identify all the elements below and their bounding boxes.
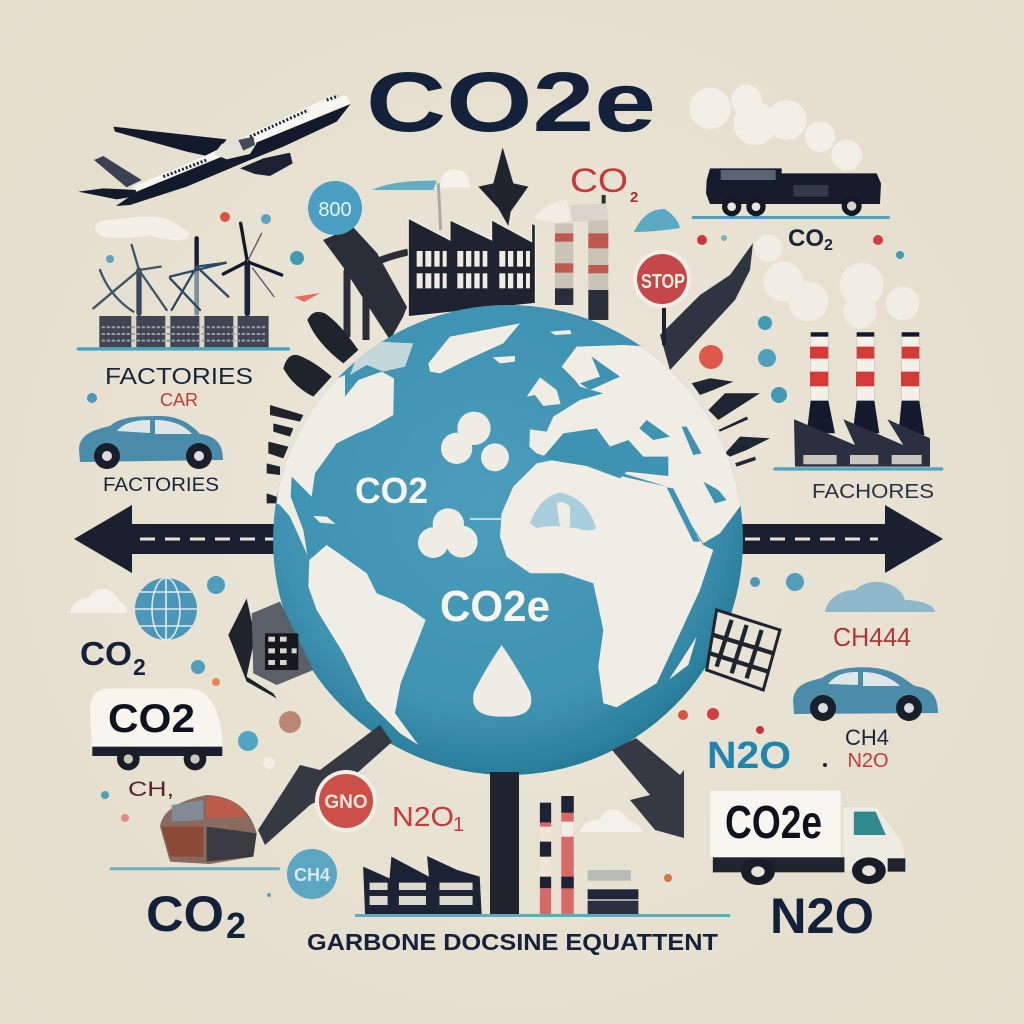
land: south america	[308, 545, 426, 745]
icon: stop sign: STOP	[641, 271, 685, 293]
icon: cloud right	[825, 582, 935, 612]
sea: baltic	[580, 357, 620, 390]
icon: airplane	[78, 96, 351, 206]
label: N2O red: N2O	[392, 801, 454, 832]
icon: blue blob	[634, 209, 680, 232]
land: north america	[277, 372, 394, 555]
icon: cloud left	[70, 588, 127, 613]
label: CH3 left: CH,	[128, 778, 174, 801]
icon: bottom factory	[363, 856, 482, 914]
sea: caspian	[682, 427, 702, 455]
badge: 800: 800	[318, 199, 352, 221]
arrow: top down	[478, 147, 528, 226]
debris left of globe	[267, 312, 358, 503]
title: CO2e	[366, 55, 656, 149]
icon: blue car right	[793, 667, 938, 721]
label: CO2e on globe: CO2e	[440, 582, 550, 631]
label: CO2 bottom left: CO	[146, 886, 224, 942]
icon: dark diagonal arrow lower left	[258, 725, 392, 845]
label: FACTORIES upper left: FACTORIES	[105, 363, 253, 389]
icon: grid map right	[707, 610, 780, 690]
label: CH4 N2O stack: CH4	[845, 725, 889, 750]
arrow: right road	[720, 505, 943, 573]
label: CO2 on white truck: CO2	[108, 697, 195, 741]
land: greenland	[428, 323, 520, 373]
arrow: upper right dark	[660, 243, 753, 370]
icon: central factory	[408, 218, 535, 317]
arrow: lower right	[612, 738, 684, 838]
land: africa	[500, 457, 713, 707]
land: cuba	[313, 516, 336, 524]
land: arctic islands	[350, 342, 413, 375]
land: iceland	[493, 356, 515, 363]
label: N2O bottom right: N2O	[770, 888, 874, 944]
badge: GNO: GNO	[324, 792, 368, 813]
icon: small cloud bottom	[580, 810, 642, 832]
label: N2O red subscript: 1	[453, 814, 464, 836]
icon: rusty machine	[110, 795, 280, 870]
molecule top	[441, 412, 509, 471]
label: subscript 2: 2	[630, 189, 638, 206]
arrow: diagonal under 800 badge	[323, 227, 407, 340]
land: eurasia	[529, 345, 743, 543]
arrow: bottom vertical	[490, 772, 519, 916]
label: CO2 left subscript: 2	[133, 654, 146, 680]
icon: pipes	[347, 252, 408, 340]
debris right of globe	[692, 378, 770, 467]
label: FACHORES: FACHORES	[812, 481, 934, 503]
sea: black sea	[639, 420, 670, 440]
label: CO2 truck: 2	[824, 237, 833, 254]
icon: cloud on africa	[530, 493, 596, 530]
label: CH4 N2O stack: N2O	[847, 750, 889, 772]
label: CO2 top center: CO	[570, 162, 628, 200]
icon: stop sign	[633, 250, 691, 345]
land: madagascar	[669, 637, 697, 679]
molecule middle	[418, 508, 478, 558]
icon: right chimneys with smoke	[754, 234, 943, 471]
icon: droplet	[473, 645, 531, 717]
baseline	[355, 914, 730, 917]
icon: wind turbines	[77, 217, 290, 351]
label: CO2 bottom subscript: 2	[226, 905, 246, 946]
small scattered dots	[87, 212, 904, 897]
icon: bottom chimneys	[540, 796, 574, 914]
label: CO2 truck: CO	[788, 225, 824, 252]
badge: 800	[308, 181, 362, 235]
label: N2O blue: N2O	[707, 735, 791, 777]
sea: persian gulf	[703, 482, 727, 503]
icon: dark machine bottom	[588, 870, 638, 914]
badge: CH4: CH4	[294, 865, 330, 885]
icon: clouds top right	[689, 85, 862, 170]
land: uk	[527, 377, 561, 406]
icon: black truck top right	[692, 168, 890, 219]
label: FACTORIES lower left: FACTORIES	[103, 475, 219, 496]
sea: red sea	[667, 487, 700, 542]
label: CO2 on globe: CO2	[355, 470, 428, 511]
icon: CO2e truck	[710, 791, 905, 885]
badge: GNO	[315, 770, 377, 832]
badge: CH4	[287, 849, 337, 899]
arrow: left road	[74, 505, 290, 573]
icon: blue car left	[79, 416, 223, 469]
icon: small globe	[135, 578, 197, 640]
icon: twin chimneys top	[533, 195, 608, 320]
label: bottom caption: GARBONE DOCSINE EQUATTENT	[307, 929, 718, 955]
globe	[273, 305, 743, 775]
connector line	[470, 518, 502, 520]
label: CO2 left: CO	[80, 635, 132, 672]
icon: cloud top center	[372, 169, 470, 230]
sea: mediterranean	[543, 428, 668, 478]
icon: shopping cart grid	[228, 598, 313, 698]
label: CH4 N2O stack	[845, 725, 889, 772]
icon: white CO2 truck left	[90, 689, 222, 770]
label: CAR: CAR	[160, 390, 198, 410]
label: CO2e on truck: CO2e	[725, 796, 822, 848]
label: CH444: CH444	[833, 622, 911, 652]
